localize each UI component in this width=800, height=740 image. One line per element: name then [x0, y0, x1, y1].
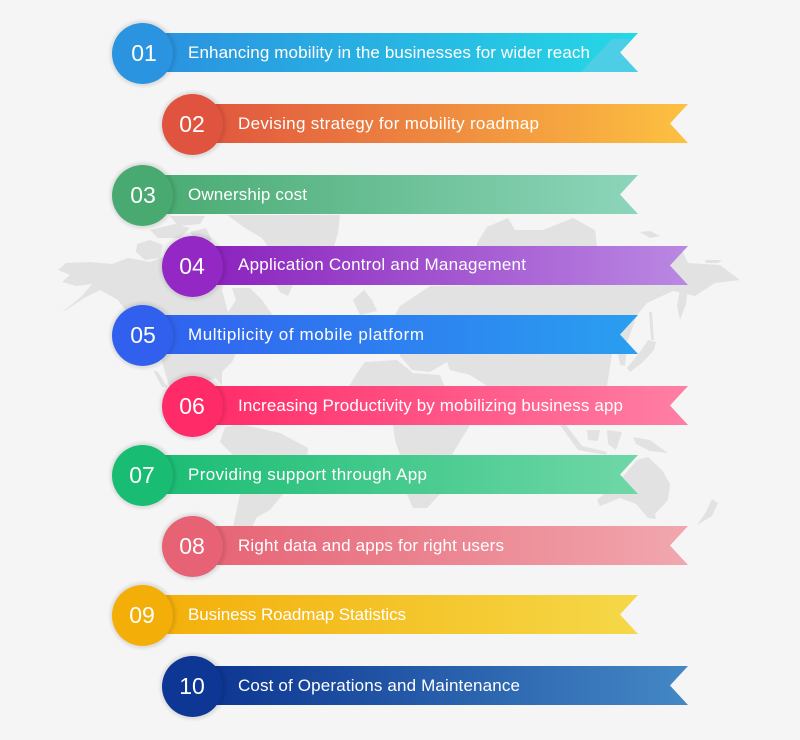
ribbon 04 [193, 246, 688, 285]
label 03: Ownership cost [188, 185, 307, 204]
item 03 [110, 162, 638, 228]
label 10: Cost of Operations and Maintenance [238, 676, 520, 695]
ribbon 02 [193, 104, 688, 143]
badge 02 [162, 94, 223, 155]
item 05 [110, 302, 638, 368]
badge 03 [112, 165, 173, 226]
badge shadow 06 [160, 374, 226, 440]
item 07 [110, 442, 638, 508]
badge shadow 09 [110, 582, 176, 648]
number 07: 07 [129, 462, 155, 488]
badge 05 [112, 305, 173, 366]
ribbon 07 [143, 455, 638, 494]
badge 10 [162, 656, 223, 717]
world map [58, 215, 740, 527]
item 08 [160, 514, 688, 580]
ribbon 10 [193, 666, 688, 705]
badge shadow 10 [160, 654, 226, 720]
number 05: 05 [130, 322, 156, 348]
item 01 [110, 20, 638, 86]
ribbon 03 [143, 175, 638, 214]
number 02: 02 [179, 111, 205, 137]
badge 04 [162, 236, 223, 297]
label 05: Multiplicity of mobile platform [188, 325, 424, 344]
item 06 [160, 374, 688, 440]
ribbon 05 [143, 315, 638, 354]
badge shadow 01 [110, 20, 176, 86]
ribbon 08 [193, 526, 688, 565]
number 03: 03 [130, 182, 156, 208]
ribbon 09 [143, 595, 638, 634]
badge shadow 08 [160, 514, 226, 580]
ribbon fold 01 [581, 39, 638, 72]
number 04: 04 [179, 253, 205, 279]
item 02 [160, 92, 688, 158]
number 09: 09 [129, 602, 155, 628]
badge 09 [112, 585, 173, 646]
ribbon 01 [143, 33, 638, 72]
badge 08 [162, 516, 223, 577]
item 09 [110, 582, 638, 648]
label 02: Devising strategy for mobility roadmap [238, 114, 539, 133]
item 10 [160, 654, 688, 720]
number 10: 10 [179, 673, 205, 699]
label 01: Enhancing mobility in the businesses for wider reach [188, 43, 590, 62]
badge 01 [112, 23, 173, 84]
badge shadow 07 [110, 442, 176, 508]
badge 07 [112, 445, 173, 506]
label 06: Increasing Productivity by mobilizing business app [238, 396, 623, 415]
number 01: 01 [131, 40, 157, 66]
label 09: Business Roadmap Statistics [188, 605, 406, 624]
label 08: Right data and apps for right users [238, 536, 504, 555]
badge shadow 05 [110, 302, 176, 368]
badge shadow 02 [160, 92, 226, 158]
badge shadow 03 [110, 162, 176, 228]
ribbon 06 [193, 386, 688, 425]
label 07: Providing support through App [188, 465, 427, 484]
label 04: Application Control and Management [238, 255, 526, 274]
number 06: 06 [179, 393, 205, 419]
item 04 [160, 234, 688, 300]
number 08: 08 [179, 533, 205, 559]
badge 06 [162, 376, 223, 437]
badge shadow 04 [160, 234, 226, 300]
